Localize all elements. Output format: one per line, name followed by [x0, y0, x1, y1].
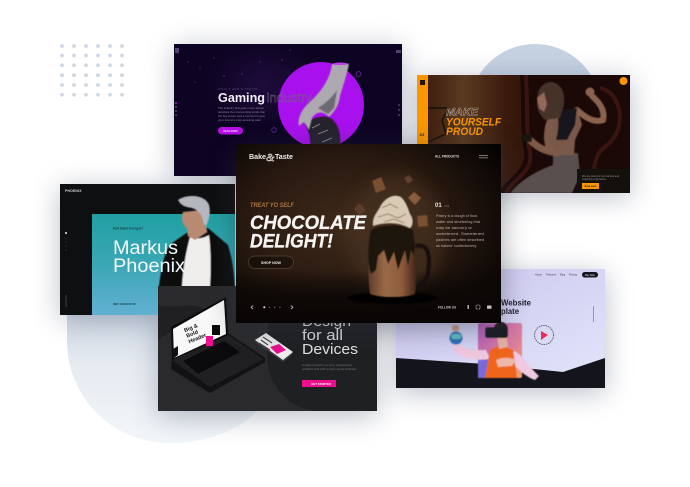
panel: markus phoenix: PHOENIX	[65, 189, 82, 193]
panel: vr website template: Buy Now	[585, 274, 595, 277]
panel: vr website template: plate	[501, 307, 520, 316]
logo: Taste	[275, 154, 293, 161]
panel: chocolate delight	[236, 144, 501, 323]
headline: DELIGHT!	[250, 230, 333, 252]
circle: bottom left blob	[67, 300, 265, 443]
slide counter: 01	[435, 203, 442, 209]
purple circle	[278, 62, 364, 148]
info box: Read more	[585, 186, 597, 188]
dot grid	[60, 44, 124, 97]
description: as bakers' confectionery.	[436, 244, 477, 248]
description: water and shortening that	[436, 220, 480, 224]
nav	[535, 274, 577, 276]
infographic canvas	[44, 32, 646, 443]
side nav	[65, 232, 67, 307]
panel: gaming industry	[174, 40, 402, 176]
eyebrow: WHAT'S NEW & TRENDS	[218, 88, 259, 91]
milkshake jar	[368, 196, 429, 297]
panel: gaming industry: Industry	[266, 91, 313, 105]
body text	[218, 107, 265, 122]
description: pastries are often described	[436, 238, 484, 242]
portrait	[159, 196, 235, 296]
vr person	[450, 322, 539, 380]
panel: design for all devices	[158, 286, 377, 411]
heading	[302, 323, 358, 354]
info box: coaching experience	[582, 178, 607, 181]
follow us: FOLLOW US	[438, 306, 456, 310]
panel: design for all devices: websites that with a clean visual interface	[302, 367, 357, 371]
body text: the big screen and a moment to give	[218, 114, 266, 118]
laptop: Big &	[183, 323, 199, 334]
orange strip	[417, 75, 428, 144]
body text: The industry that goes never sleeps	[218, 106, 265, 110]
panel: chocolate delight: / 04	[444, 204, 449, 208]
headline: YOURSELF	[446, 116, 501, 128]
laptop screen	[173, 300, 226, 358]
background letter outline	[501, 75, 582, 193]
panel: make yourself proud	[417, 75, 630, 193]
round badge	[620, 77, 628, 85]
phone	[255, 333, 293, 362]
headline	[446, 108, 502, 135]
panel: markus phoenix: Phoenix	[113, 256, 186, 277]
panel shadows	[60, 48, 630, 417]
robot hand	[305, 117, 340, 148]
eyebrow: TREAT YO SELF	[250, 203, 294, 209]
side dots	[175, 48, 401, 116]
heading: Website	[501, 298, 532, 308]
heading: Devices	[302, 341, 358, 358]
laptop: Header	[188, 332, 208, 345]
pink button	[302, 380, 336, 387]
description: sweetened. Sweetened	[436, 232, 484, 236]
info box	[577, 169, 619, 193]
teal panel	[92, 214, 235, 315]
laptop: Bold	[186, 329, 199, 340]
name: Full Stack Designer	[113, 226, 144, 230]
floor	[396, 358, 605, 388]
button	[218, 127, 243, 134]
circle: top right blob	[469, 44, 601, 176]
shop now button: SHOP NOW	[261, 261, 282, 265]
panel: markus phoenix: Markus	[113, 238, 178, 259]
logo: &	[266, 152, 275, 164]
nav: Home	[535, 272, 542, 276]
heading: Design	[302, 313, 351, 330]
shop now button	[248, 256, 294, 268]
panel: make yourself proud: 2/2	[420, 133, 424, 137]
logo	[249, 154, 293, 162]
nav: Features	[546, 272, 557, 276]
chocolate pieces	[354, 175, 428, 227]
button: READ MORE	[223, 130, 238, 133]
description	[436, 214, 484, 248]
heading: for all	[302, 327, 343, 344]
top nav: ALL PRODUCTS	[435, 154, 460, 158]
headline: MAKE	[446, 106, 479, 118]
body text: your brand a truly amazing start	[218, 118, 261, 122]
stars	[187, 49, 291, 83]
headline: PROUD	[446, 126, 483, 138]
athlete	[510, 82, 604, 193]
heading: Gaming	[218, 91, 265, 105]
panel: markus phoenix	[60, 184, 235, 315]
body text: develops the most exciting trends that	[218, 110, 265, 114]
social icons	[468, 305, 492, 309]
panel: markus phoenix: WHAT I CAN DO FOR YOU	[113, 302, 136, 306]
headline	[250, 212, 367, 252]
marble hand	[299, 64, 349, 130]
play badge	[534, 326, 554, 344]
laptop	[171, 297, 265, 393]
pink button: GET STARTED	[311, 382, 331, 386]
shadow: chocolate panel	[236, 150, 501, 329]
nav: Blog	[560, 272, 566, 276]
description: Pastry is a dough of flour,	[436, 214, 478, 218]
nav: Pricing	[569, 272, 577, 276]
headline: CHOCOLATE	[250, 212, 367, 234]
description: may be savoury or	[436, 226, 473, 230]
slider controls	[251, 306, 293, 309]
logo: Bake	[249, 154, 266, 161]
panel: vr website template	[396, 269, 605, 388]
info box: We are proud of our training and	[582, 175, 620, 178]
small text: Implemented in a very responsive	[302, 363, 353, 367]
